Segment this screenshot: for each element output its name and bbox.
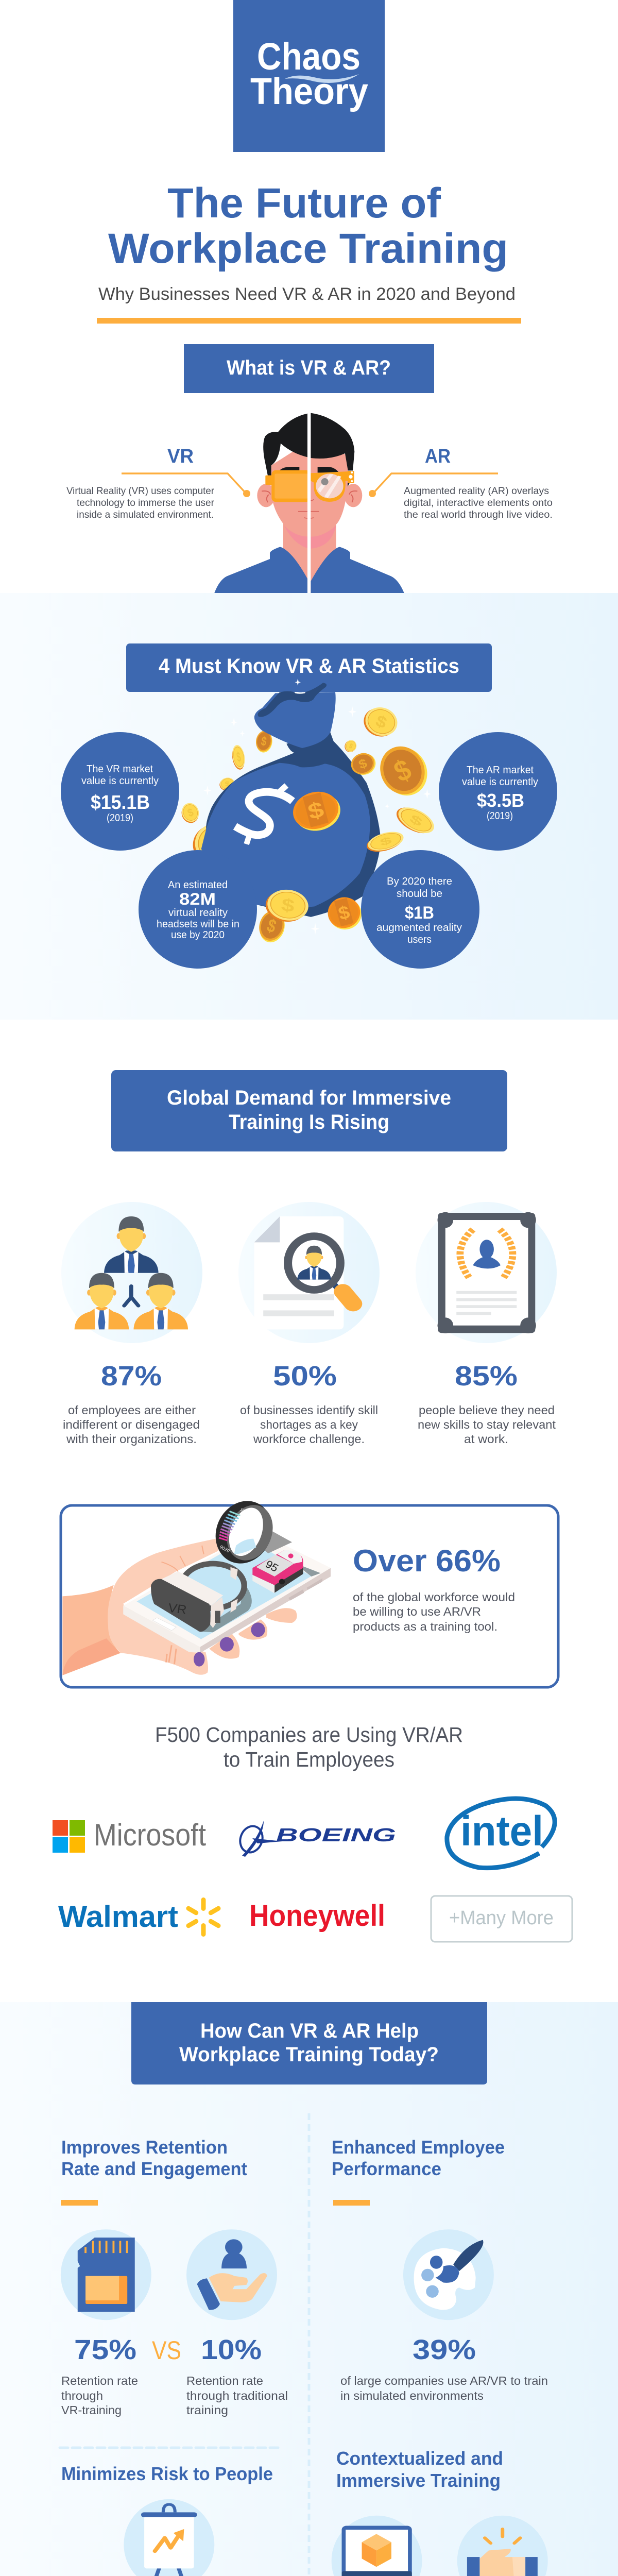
logo: Chaos Theory xyxy=(233,0,385,152)
panel: AR definition xyxy=(369,446,553,520)
block: contextualized and immersive training xyxy=(332,2448,552,2576)
block: enhanced employee performance: in simulated environments xyxy=(340,2389,484,2402)
heading: 4 Must Know VR & AR Statistics: 4 Must Know VR & AR Statistics xyxy=(159,655,459,677)
heading: 4 Must Know VR & AR Statistics xyxy=(126,643,492,692)
logo: Boeing xyxy=(236,1821,396,1857)
stat: AR users xyxy=(361,850,479,969)
stat: AR market value: The AR market xyxy=(467,765,534,776)
icon: hand with person xyxy=(186,2229,277,2320)
stat column: 50% businesses: workforce challenge. xyxy=(253,1432,365,1446)
icon: VR headset: VR xyxy=(167,1601,187,1617)
block: improves retention: Retention rate xyxy=(186,2374,263,2387)
stat: AR users: By 2020 there xyxy=(387,876,452,887)
stat: VR headsets: virtual reality xyxy=(168,907,228,919)
badge: many more: +Many More xyxy=(449,1907,554,1929)
callout: over 66% panel xyxy=(61,1494,558,1687)
title: Workplace Training xyxy=(108,225,508,272)
stat column: 85% people xyxy=(416,1202,557,1446)
icon: framed certificate xyxy=(437,1212,536,1333)
stat: AR market value: (2019) xyxy=(487,810,513,822)
block: improves retention: 75% xyxy=(74,2334,136,2365)
heading: How Can VR & AR Help: How Can VR & AR Help xyxy=(200,2020,419,2042)
callout: over 66% panel: Over 66% xyxy=(353,1544,501,1578)
panel: VR definition: Virtual Reality (VR) uses computer xyxy=(66,486,215,497)
stat: AR market value xyxy=(439,732,557,851)
block: enhanced employee performance xyxy=(332,2137,548,2402)
heading: F500 companies: to Train Employees xyxy=(224,1748,394,1771)
icon: hierarchy of people xyxy=(75,1216,188,1329)
stat column: 87% employees xyxy=(61,1202,202,1446)
panel: VR definition: inside a simulated environment. xyxy=(77,510,214,520)
stat: AR users: augmented reality xyxy=(376,922,462,934)
heading: How Can VR & AR Help: Workplace Training Today? xyxy=(179,2043,439,2066)
heading: How Can VR & AR Help xyxy=(131,2002,487,2084)
stat: VR market value: $15.1B xyxy=(91,792,150,814)
heading: What is VR & AR?: What is VR & AR? xyxy=(227,357,391,379)
block: contextualized and immersive training: Contextualized and xyxy=(336,2448,503,2469)
logo: Microsoft: Microsoft xyxy=(94,1818,206,1852)
logo: Microsoft xyxy=(53,1818,206,1853)
block: enhanced employee performance: of large companies use AR/VR to train xyxy=(340,2374,548,2387)
heading: F500 companies xyxy=(155,1723,463,1771)
block: minimizes risk: Minimizes Risk to People xyxy=(61,2463,273,2484)
logo: Walmart xyxy=(58,1897,221,1937)
stat: AR users: users xyxy=(407,934,432,945)
finger nails xyxy=(194,1622,265,1667)
block: contextualized and immersive training: Immersive Training xyxy=(336,2470,501,2491)
heading: Global Demand xyxy=(111,1070,507,1151)
stat: AR users: should be xyxy=(397,888,442,900)
illustration: person half VR half AR xyxy=(214,407,404,594)
icon: paint palette xyxy=(403,2229,494,2320)
stat column: 87% employees: 87% xyxy=(101,1361,162,1392)
icon: fitness band xyxy=(207,1494,281,1570)
heading: What is VR & AR? xyxy=(184,344,434,393)
heading: F500 companies: F500 Companies are Using VR/AR xyxy=(155,1723,463,1747)
panel: VR definition xyxy=(66,446,250,520)
panel: how VR and AR help xyxy=(0,2002,618,2576)
icon: pulse oximeter xyxy=(252,1550,303,1594)
block: improves retention: through xyxy=(61,2389,103,2402)
logo: Intel: intel xyxy=(460,1808,543,1855)
stat: VR headsets: An estimated xyxy=(168,879,228,891)
panel: AR definition: digital, interactive elements onto xyxy=(404,498,553,509)
stat column: 85% people: 85% xyxy=(455,1361,518,1392)
panel: AR definition: the real world through live video. xyxy=(404,510,553,520)
stat: VR market value xyxy=(61,732,179,851)
stat column: 50% businesses: shortages as a key xyxy=(260,1418,358,1431)
callout: over 66% panel: products as a training tool. xyxy=(353,1620,497,1633)
logo: Honeywell: Honeywell xyxy=(249,1899,385,1933)
stat column: 50% businesses: of businesses identify skill xyxy=(240,1403,378,1417)
block: improves retention: VR-training xyxy=(61,2403,122,2417)
logo: Chaos Theory: Theory xyxy=(250,71,368,112)
stat: AR market value: value is currently xyxy=(462,776,538,788)
icon: document and magnifier xyxy=(254,1216,353,1329)
stat column: 87% employees: of employees are either xyxy=(68,1403,196,1417)
stat: AR users: $1B xyxy=(405,903,434,923)
panel: VR definition: VR xyxy=(167,446,194,467)
block: improves retention: Retention rate xyxy=(61,2374,138,2387)
block: improves retention: through traditional xyxy=(186,2389,288,2402)
heading: Global Demand: Training Is Rising xyxy=(229,1111,389,1133)
stat: VR headsets xyxy=(139,850,257,969)
stat: VR market value: (2019) xyxy=(107,812,133,824)
block: enhanced employee performance: 39% xyxy=(413,2334,476,2365)
block: minimizes risk xyxy=(51,2463,289,2576)
logo: Intel xyxy=(447,1799,555,1868)
panel: AR definition: Augmented reality (AR) overlays xyxy=(404,486,549,497)
icon: SD card xyxy=(61,2229,151,2320)
stat column: 87% employees: with their organizations. xyxy=(66,1432,197,1446)
icon: fitness band: 103 xyxy=(239,1507,248,1515)
block: improves retention xyxy=(61,2137,288,2417)
illustration: money bag with coins xyxy=(179,679,438,945)
panel: AR definition: AR xyxy=(425,446,451,467)
icon: fitness band: 9020 xyxy=(219,1544,231,1553)
illustration: hand holding phone with VR devices xyxy=(62,1494,331,1675)
heading: Global Demand: Global Demand for Immersive xyxy=(167,1087,451,1109)
block: improves retention: training xyxy=(186,2403,228,2417)
block: improves retention: VS xyxy=(152,2336,181,2365)
block: enhanced employee performance: Performance xyxy=(332,2158,441,2179)
stat: VR headsets: headsets will be in xyxy=(157,919,239,930)
stat: VR market value: The VR market xyxy=(87,764,153,775)
stat column: 50% businesses: 50% xyxy=(273,1361,337,1392)
callout: over 66% panel: be willing to use AR/VR xyxy=(353,1605,481,1618)
stat column: 85% people: people believe they need xyxy=(419,1403,555,1417)
stat column: 50% businesses xyxy=(238,1202,380,1446)
stat: VR market value: value is currently xyxy=(81,775,159,787)
stat: VR headsets: use by 2020 xyxy=(171,929,225,941)
stat column: 87% employees: indifferent or disengaged xyxy=(63,1418,200,1431)
stat: VR headsets: 82M xyxy=(179,890,216,908)
icon: handshake xyxy=(457,2516,548,2576)
icon: presentation easel xyxy=(124,2499,214,2576)
callout: over 66% panel: of the global workforce would xyxy=(353,1590,515,1604)
stat: AR market value: $3.5B xyxy=(477,790,524,811)
badge: many more xyxy=(431,1896,572,1942)
stat column: 85% people: new skills to stay relevant xyxy=(418,1418,556,1431)
title xyxy=(108,180,508,272)
block: enhanced employee performance: Enhanced Employee xyxy=(332,2137,505,2158)
panel: statistics section xyxy=(0,593,618,1020)
logo: Walmart: Walmart xyxy=(58,1900,178,1934)
stat column: 85% people: at work. xyxy=(464,1432,508,1446)
icon: pulse oximeter: 95 xyxy=(263,1558,281,1574)
logo: Boeing: BOEING xyxy=(276,1824,396,1845)
block: improves retention: 10% xyxy=(201,2334,262,2365)
subtitle: Why Businesses Need VR & AR in 2020 and Beyond xyxy=(98,284,516,304)
block: improves retention: Improves Retention xyxy=(61,2137,228,2158)
logo: Chaos Theory: Chaos xyxy=(257,35,360,78)
title: The Future of xyxy=(167,180,441,227)
panel: VR definition: technology to immerse the user xyxy=(77,498,215,509)
icon: monitor with cube xyxy=(332,2516,422,2576)
icon: VR headset xyxy=(151,1564,244,1632)
block: improves retention: Rate and Engagement xyxy=(61,2158,247,2179)
